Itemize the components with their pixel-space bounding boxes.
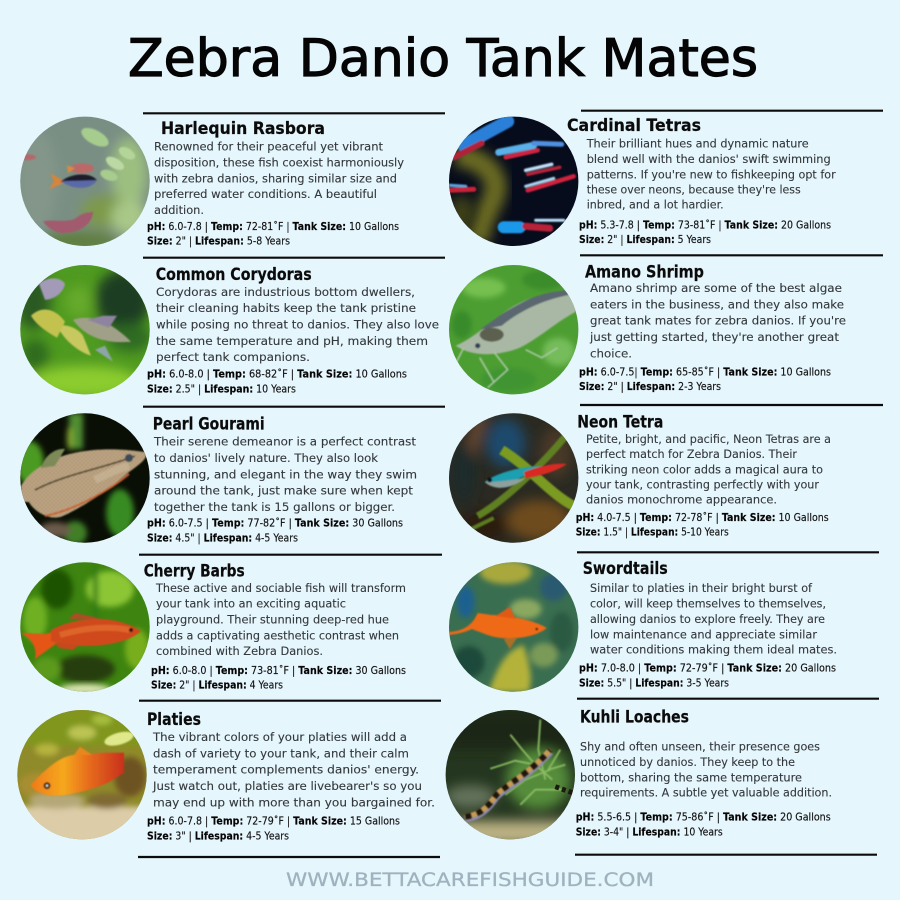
heading: Common Corydoras	[156, 265, 312, 284]
description: may end up with more than you bargained for.	[153, 795, 435, 809]
description: together the tank is 15 gallons or bigger.	[154, 500, 395, 514]
description: requirements. A subtle yet valuable addition.	[580, 786, 832, 800]
description	[590, 581, 837, 656]
description	[155, 581, 406, 658]
photo: Neon Tetra	[449, 413, 579, 543]
stats: Size: 2" | Lifespan: 4 Years	[151, 680, 283, 692]
description: temperament complements danios' energy.	[153, 763, 419, 777]
description: These active and sociable fish will transform	[155, 581, 406, 595]
stats	[579, 663, 836, 690]
heading: Neon Tetra	[577, 412, 663, 431]
heading: Amano Shrimp	[585, 262, 704, 281]
heading: Pearl Gourami	[153, 414, 265, 433]
stats	[151, 665, 406, 692]
description	[586, 136, 836, 212]
photo: Kuhli Loaches	[444, 710, 575, 845]
stats: Size: 2.5" | Lifespan: 10 Years	[147, 383, 296, 395]
description: Corydoras are industrious bottom dwellers,	[156, 285, 415, 299]
panel: Amano Shrimp	[449, 255, 883, 395]
description: adds a captivating aesthetic contrast when	[156, 628, 399, 642]
description: the same temperature and pH, making them	[156, 334, 428, 348]
description	[153, 435, 417, 514]
description: Renowned for their peaceful yet vibrant	[154, 140, 383, 154]
description: playground. Their stunning deep-red hue	[156, 612, 389, 626]
stats	[147, 518, 403, 544]
description: striking neon color adds a magical aura to	[586, 462, 823, 476]
description: addition.	[154, 203, 204, 217]
panel: Swordtails	[449, 552, 879, 692]
panel: Cherry Barbs	[20, 555, 442, 694]
stats: Size: 3" | Lifespan: 4-5 Years	[147, 830, 289, 842]
title: Zebra Danio Tank Mates	[128, 29, 758, 89]
heading: Cherry Barbs	[144, 562, 245, 581]
description: stunning, and elegant in the way they swim	[154, 467, 417, 481]
description: unnoticed by danios. They keep to the	[580, 755, 795, 769]
stats: pH: 6.0-7.8 | Temp: 72-79˚F | Tank Size: 15 Gallons	[147, 816, 400, 828]
description: choice.	[590, 346, 632, 360]
photo: Cherry Barbs	[20, 562, 150, 694]
description: Their serene demeanor is a perfect contrast	[153, 435, 416, 449]
stats: pH: 5.3-7.8 | Temp: 73-81˚F | Tank Size: 20 Gallons	[579, 219, 831, 231]
stats: pH: 6.0-8.0 | Temp: 73-81˚F | Tank Size: 30 Gallons	[151, 665, 406, 677]
description: just getting started, they're another great	[589, 330, 839, 344]
panel: Pearl Gourami	[16, 407, 445, 545]
stats: Size: 4.5" | Lifespan: 4-5 Years	[147, 532, 298, 544]
stats: Size: 3-4" | Lifespan: 10 Years	[576, 826, 723, 838]
description: patterns. If you're new to fishkeeping opt for	[587, 167, 836, 181]
description: these over neons, because they're less	[587, 182, 801, 196]
panel: Cardinal Tetras	[448, 111, 883, 246]
stats: pH: 7.0-8.0 | Temp: 72-79˚F | Tank Size: 20 Gallons	[579, 663, 836, 675]
photo: Amano Shrimp	[449, 265, 579, 395]
description: low maintenance and appreciate similar	[590, 627, 817, 641]
description: Shy and often unseen, their presence goes	[580, 740, 820, 754]
footer url: WWW.BETTACAREFISHGUIDE.COM	[286, 869, 654, 891]
stats	[579, 366, 831, 393]
heading: Swordtails	[583, 559, 668, 578]
stats: Size: 5.5" | Lifespan: 3-5 Years	[579, 678, 729, 690]
panel: Harlequin Rasbora	[17, 113, 445, 251]
description	[580, 740, 832, 800]
stats: pH: 4.0-7.5 | Temp: 72-78˚F | Tank Size: 10 Gallons	[576, 512, 829, 524]
description: Just watch out, platies are livebearer's so you	[152, 779, 422, 793]
description: while posing no threat to danios. They also love	[156, 317, 439, 331]
description: disposition, these fish coexist harmoniously	[154, 156, 404, 170]
description: to danios' lively nature. They also look	[154, 451, 378, 465]
description: around the tank, just make sure when kept	[154, 484, 413, 498]
description: their cleaning habits keep the tank pristine	[156, 301, 416, 315]
description: preferred water conditions. A beautiful	[154, 187, 377, 201]
photo: Platies	[17, 710, 147, 845]
heading: Harlequin Rasbora	[161, 119, 325, 138]
stats: pH: 6.0-7.5 | Temp: 77-82˚F | Tank Size: 30 Gallons	[147, 518, 403, 530]
description: water conditions making them ideal mates.	[590, 642, 837, 656]
description: perfect match for Zebra Danios. Their	[586, 447, 797, 461]
description	[154, 140, 404, 217]
description: combined with Zebra Danios.	[156, 644, 323, 658]
stats: pH: 6.0-8.0 | Temp: 68-82˚F | Tank Size: 10 Gallons	[147, 369, 407, 381]
photo: Pearl Gourami	[16, 413, 150, 545]
description: with zebra danios, sharing similar size and	[154, 171, 397, 185]
heading: Platies	[147, 710, 201, 729]
photo: Cardinal Tetras	[448, 116, 579, 246]
description	[586, 432, 831, 507]
stats: pH: 5.5-6.5 | Temp: 75-86˚F | Tank Size: 20 Gallons	[576, 812, 831, 824]
stats	[147, 816, 400, 842]
description: eaters in the business, and they also make	[590, 297, 844, 311]
panel: Kuhli Loaches	[444, 699, 879, 855]
description: danios monochrome appearance.	[586, 493, 777, 507]
description: your tank into an exciting aquatic	[156, 597, 346, 611]
photo: Common Corydoras	[15, 265, 152, 398]
description: Their brilliant hues and dynamic nature	[586, 136, 809, 150]
heading: Cardinal Tetras	[567, 116, 701, 135]
description: inbred, and a lot hardier.	[587, 198, 724, 212]
heading: Kuhli Loaches	[580, 708, 689, 727]
photo: Harlequin Rasbora	[17, 116, 150, 251]
stats: Size: 1.5" | Lifespan: 5-10 Years	[576, 527, 729, 539]
description: your tank, contrasting perfectly with your	[586, 477, 819, 491]
photo: Swordtails	[449, 560, 579, 692]
stats	[576, 812, 831, 838]
panel: Platies	[17, 701, 441, 857]
description: Amano shrimp are some of the best algae	[590, 281, 842, 295]
description: allowing danios to explore freely. They are	[590, 612, 825, 626]
stats: pH: 6.0-7.5| Temp: 65-85˚F | Tank Size: 10 Gallons	[579, 366, 831, 378]
description: The vibrant colors of your platies will add a	[152, 730, 407, 744]
stats: Size: 2" | Lifespan: 2-3 Years	[579, 381, 721, 393]
stats: Size: 2" | Lifespan: 5 Years	[579, 234, 711, 246]
description: Petite, bright, and pacific, Neon Tetras are a	[586, 432, 831, 446]
description: great tank mates for zebra danios. If you're	[590, 314, 846, 328]
description	[156, 285, 439, 364]
description: blend well with the danios' swift swimming	[587, 152, 831, 166]
panel: Common Corydoras	[15, 258, 445, 398]
description: perfect tank companions.	[156, 350, 310, 364]
stats	[147, 221, 399, 248]
stats	[576, 512, 829, 539]
panel: Neon Tetra	[449, 405, 883, 543]
stats	[147, 369, 407, 395]
description: bottom, sharing the same temperature	[580, 770, 802, 784]
description	[589, 281, 846, 360]
description: Similar to platies in their bright burst of	[590, 581, 813, 595]
stats	[579, 219, 831, 246]
description: color, will keep themselves to themselves,	[590, 596, 826, 610]
description	[152, 730, 435, 809]
stats: Size: 2" | Lifespan: 5-8 Years	[147, 236, 290, 248]
description: dash of variety to your tank, and their calm	[153, 746, 409, 760]
stats: pH: 6.0-7.8 | Temp: 72-81˚F | Tank Size: 10 Gallons	[147, 221, 399, 233]
